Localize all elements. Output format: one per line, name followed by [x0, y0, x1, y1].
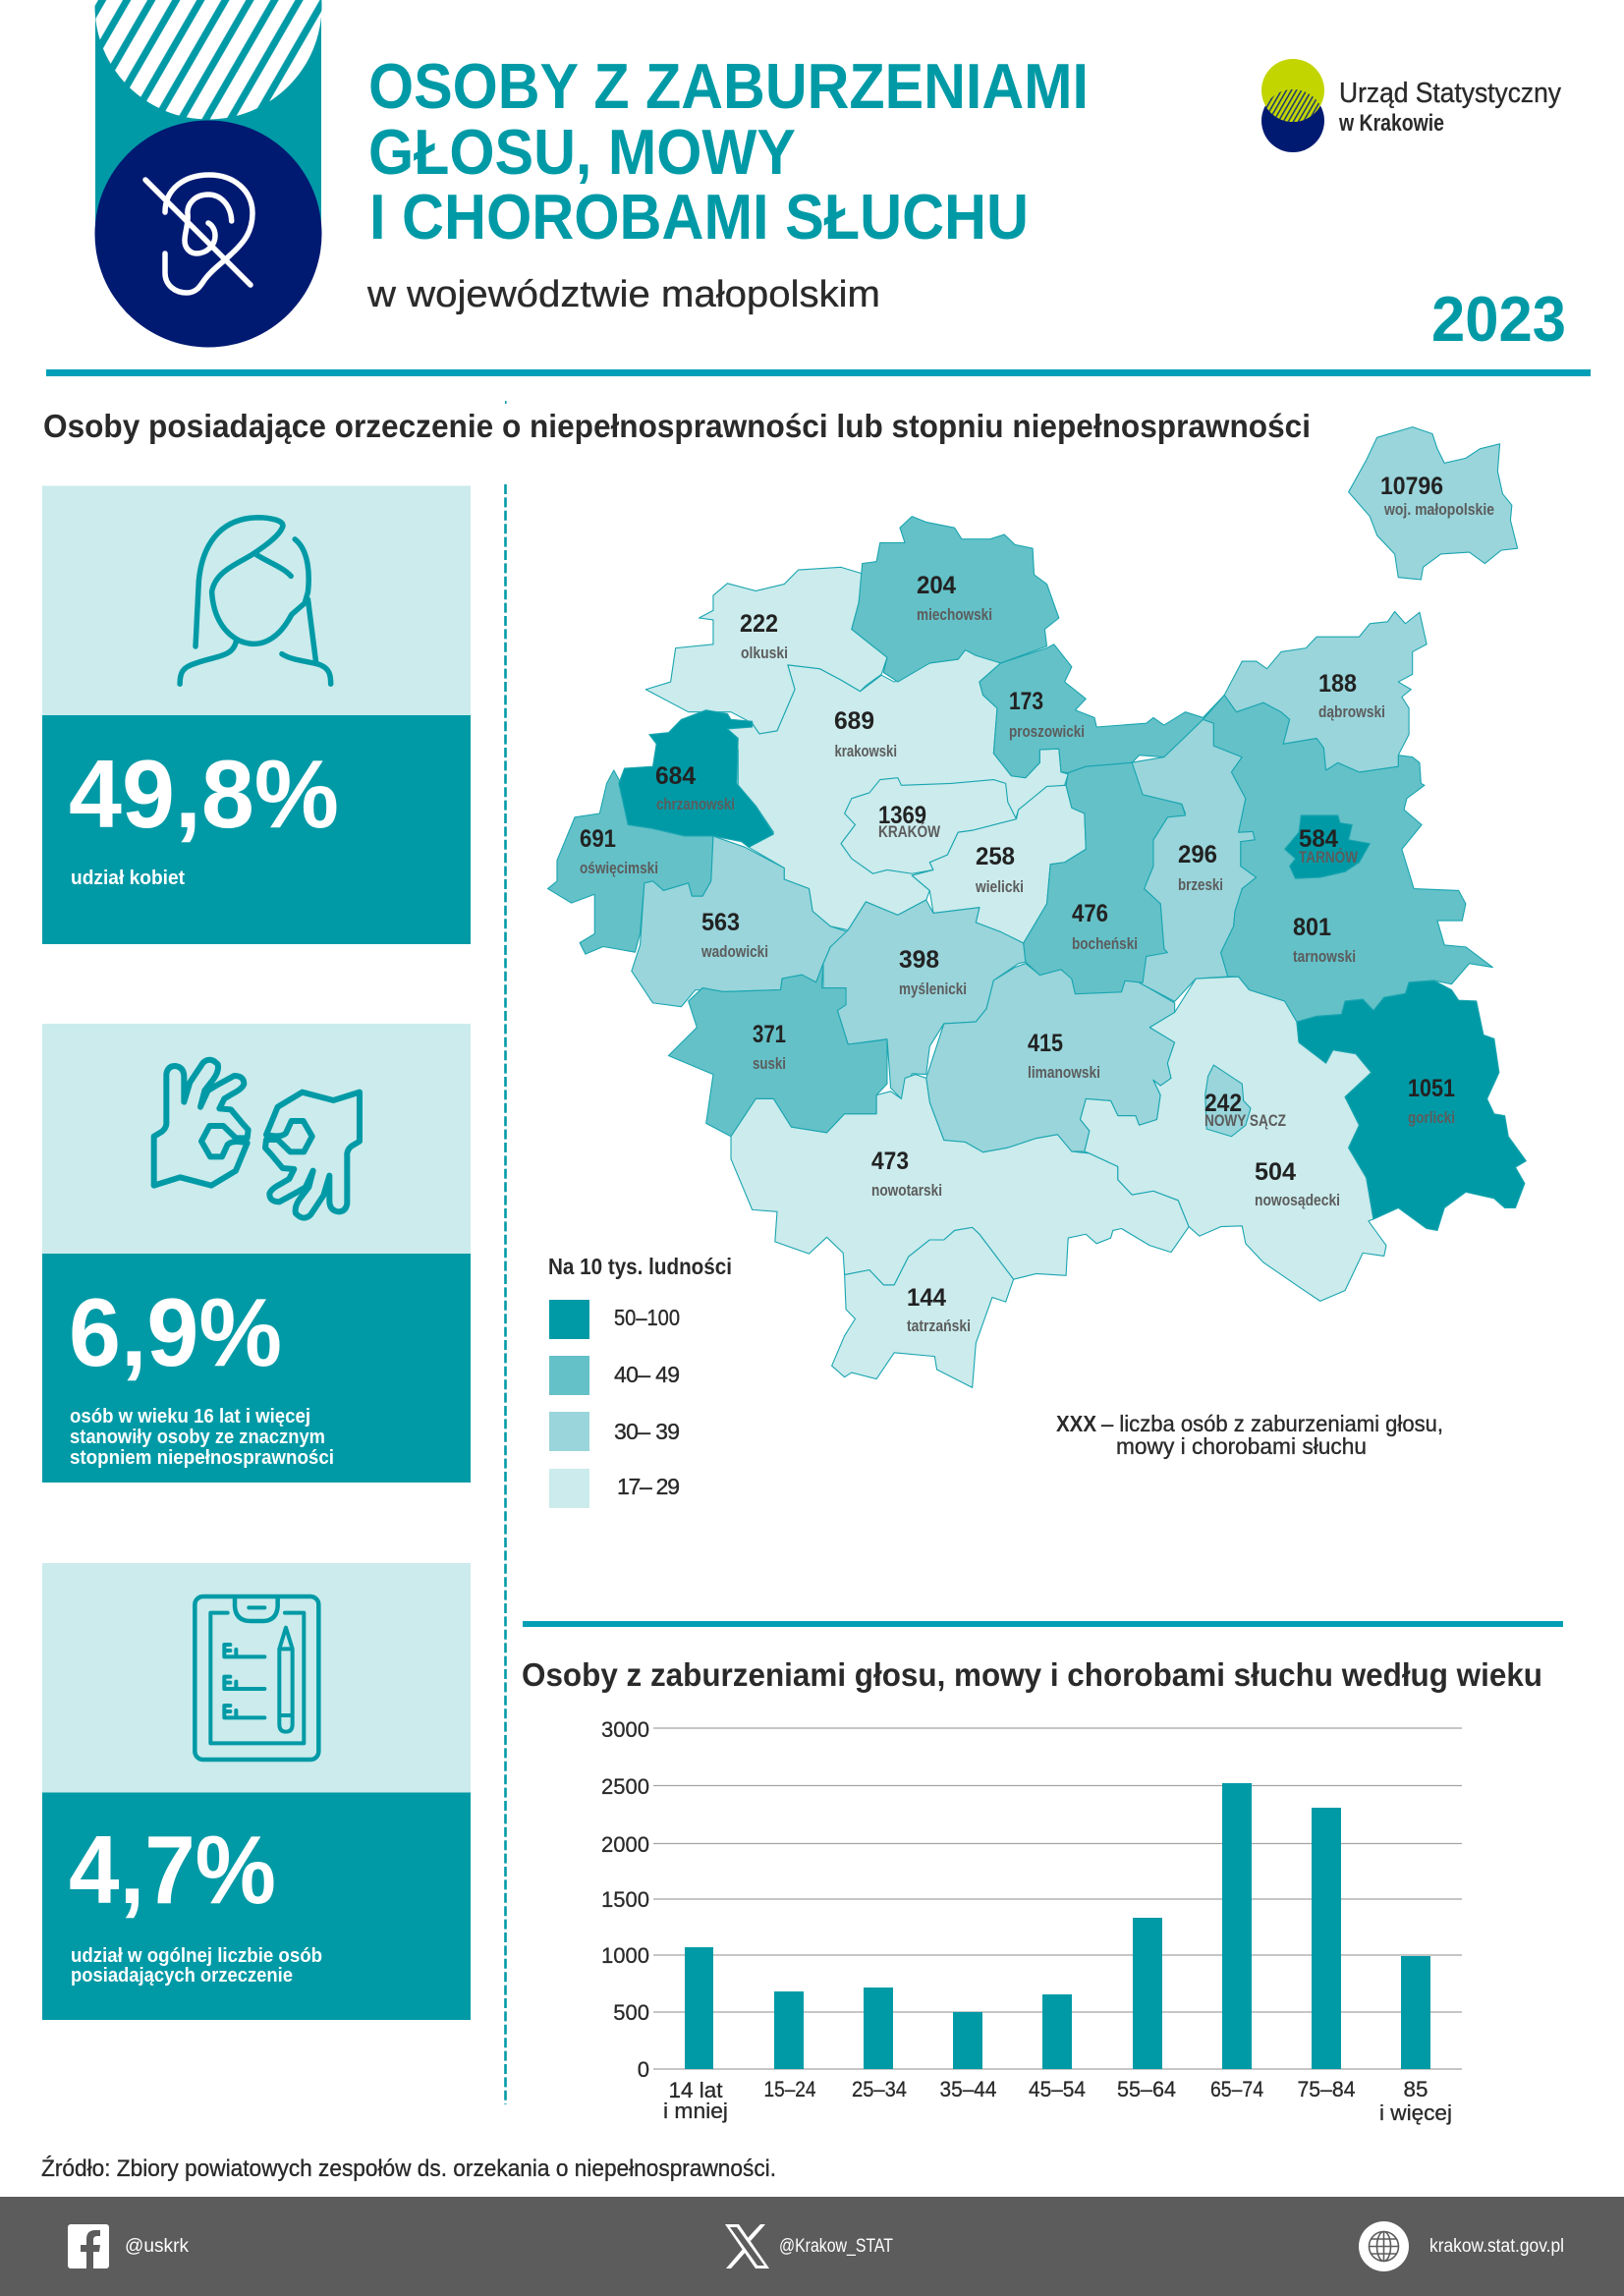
region: krakowski	[724, 650, 1068, 930]
map labels: 1369	[878, 802, 926, 829]
bar chart: 15–24	[764, 2077, 815, 2101]
map labels: chrzanowski	[656, 795, 735, 813]
panel: severe disability share: stanowiły osoby ze znacznym	[70, 1427, 325, 1448]
icon: sign language hands	[154, 1060, 360, 1218]
map labels: oświęcimski	[580, 859, 658, 877]
region: suski	[668, 964, 887, 1137]
map legend: 17– 29	[617, 1474, 680, 1499]
panel: severe disability share: osób w wieku 16 lat i więcej	[70, 1406, 310, 1428]
region: dąbrowski	[1224, 611, 1427, 772]
title: OSOBY Z ZABURZENIAMI	[368, 50, 1089, 122]
bar chart: 25–34	[852, 2077, 907, 2101]
region: miechowski	[852, 517, 1059, 682]
panel: share of all certified	[42, 1563, 471, 2020]
map labels: 563	[701, 909, 740, 936]
map legend: 40– 49	[614, 1362, 680, 1387]
map labels: krakowski	[835, 742, 897, 760]
bar chart: 35–44	[939, 2077, 996, 2101]
title: GŁOSU, MOWY	[368, 116, 796, 188]
map labels: 188	[1318, 670, 1357, 698]
bar chart: 45–54	[1029, 2077, 1086, 2101]
logo: Urząd Statystyczny	[1339, 78, 1561, 109]
region: tatrzański	[832, 1227, 1014, 1387]
map labels: 584	[1299, 825, 1338, 853]
map labels: 1051	[1408, 1075, 1455, 1102]
map labels: nowotarski	[871, 1181, 942, 1200]
map note: – liczba osób z zaburzeniami głosu,	[1101, 1411, 1443, 1436]
map labels: 371	[753, 1021, 786, 1048]
panel: women share	[42, 485, 471, 944]
map labels	[580, 473, 1494, 1335]
bar chart: 55–64	[1117, 2077, 1176, 2101]
map labels: 473	[871, 1148, 909, 1175]
bar chart: 14 lat	[668, 2078, 723, 2102]
footer	[0, 2197, 1624, 2296]
region: nowotarski	[731, 1075, 1189, 1285]
map labels: 204	[917, 572, 956, 599]
bar chart: 2000	[601, 1832, 649, 1857]
footer: @uskrk	[125, 2236, 189, 2257]
region: olkuski	[645, 567, 887, 734]
panel: severe disability share: 6,9%	[69, 1278, 282, 1386]
map labels: olkuski	[741, 644, 788, 662]
bar chart: 65–74	[1210, 2077, 1263, 2101]
subtitle: w województwie małopolskim	[366, 274, 880, 315]
bar chart: 500	[613, 2000, 649, 2025]
icon: clipboard	[195, 1596, 318, 1760]
header emblem	[94, 0, 322, 348]
map note	[1056, 1411, 1443, 1459]
map labels: 296	[1178, 841, 1217, 868]
map labels: 144	[907, 1284, 946, 1312]
map labels: gorlicki	[1408, 1108, 1455, 1127]
source: Źródło: Zbiory powiatowych zespołów ds. orzekania o niepełnosprawności.	[41, 2156, 776, 2182]
map labels: 242	[1204, 1090, 1242, 1117]
icon: facebook	[68, 2224, 109, 2268]
map labels: brzeski	[1178, 875, 1223, 894]
region: Nowy Sącz	[1205, 1065, 1251, 1137]
map labels: NOWY SĄCZ	[1204, 1111, 1286, 1130]
map labels: proszowicki	[1009, 722, 1085, 741]
panel: share of all certified: udział w ogólnej liczbie osób	[71, 1945, 322, 1967]
region: nowosądecki	[1081, 977, 1386, 1301]
map labels: 222	[740, 610, 778, 638]
map labels: 258	[976, 843, 1015, 870]
icon: globe	[1359, 2221, 1409, 2271]
map labels: 173	[1009, 688, 1043, 715]
region: myślenicki	[823, 900, 1026, 1098]
icon: woman	[180, 518, 331, 684]
footer: @Krakow_STAT	[779, 2236, 893, 2257]
panel: share of all certified: posiadających orzeczenie	[71, 1965, 293, 1987]
region: limanowski	[926, 964, 1175, 1152]
bar chart: 0	[638, 2057, 649, 2082]
map labels: 398	[899, 946, 939, 974]
map labels: 689	[834, 707, 874, 735]
map labels: myślenicki	[899, 980, 967, 998]
panel: share of all certified: 4,7%	[69, 1816, 276, 1924]
region: bocheński	[1024, 762, 1185, 994]
bar chart: 1000	[601, 1943, 649, 1968]
chart heading: Osoby z zaburzeniami głosu, mowy i chorobami słuchu według wieku	[522, 1656, 1542, 1693]
panel: severe disability share	[42, 1024, 471, 1483]
map labels: TARNÓW	[1299, 848, 1359, 867]
bar chart: i więcej	[1379, 2100, 1452, 2125]
map labels: 415	[1028, 1030, 1063, 1057]
panel: women share: udział kobiet	[71, 868, 185, 889]
region: gorlicki	[1297, 980, 1526, 1230]
map legend: 50–100	[614, 1305, 680, 1330]
region: wielicki	[912, 785, 1086, 943]
map legend: 30– 39	[614, 1419, 680, 1444]
map labels: suski	[753, 1054, 786, 1073]
map legend: Na 10 tys. ludności	[548, 1254, 732, 1279]
panel: women share: 49,8%	[69, 740, 339, 848]
map note: mowy i chorobami słuchu	[1116, 1433, 1367, 1459]
logo	[1261, 59, 1561, 152]
region: proszowicki	[980, 644, 1224, 778]
section heading: Osoby posiadające orzeczenie o niepełnosprawności lub stopniu niepełnosprawności	[43, 408, 1311, 444]
map labels: KRAKÓW	[878, 822, 941, 841]
bar chart: 1500	[601, 1887, 649, 1912]
map labels: wielicki	[975, 877, 1024, 896]
panel: severe disability share: stopniem niepełnosprawności	[70, 1447, 334, 1469]
logo: w Krakowie	[1338, 110, 1444, 137]
map labels: miechowski	[917, 605, 992, 624]
region: brzeski	[1131, 719, 1257, 1001]
map labels: dąbrowski	[1318, 702, 1385, 721]
bar chart: 3000	[601, 1717, 649, 1742]
bar chart: 85	[1403, 2077, 1428, 2101]
map labels: tarnowski	[1293, 947, 1356, 966]
footer: krakow.stat.gov.pl	[1429, 2236, 1564, 2257]
icon: crossed-out ear	[145, 175, 252, 293]
map labels: limanowski	[1028, 1063, 1100, 1082]
map labels: 691	[580, 825, 616, 853]
icon: X	[725, 2224, 769, 2268]
region: Kraków	[841, 778, 1016, 873]
map note: XXX	[1056, 1411, 1097, 1436]
region: wadowicki	[632, 836, 848, 1007]
map legend	[548, 1254, 732, 1508]
title: I CHOROBAMI SŁUCHU	[369, 181, 1029, 252]
year: 2023	[1431, 283, 1566, 355]
map labels: 801	[1293, 914, 1331, 941]
map labels: woj. małopolskie	[1383, 500, 1494, 519]
region: tarnowski	[1204, 695, 1492, 1022]
bar chart: 75–84	[1297, 2077, 1356, 2101]
region: Tarnów	[1285, 815, 1370, 878]
map labels: nowosądecki	[1255, 1191, 1340, 1209]
choropleth map	[548, 427, 1526, 1387]
map labels: 684	[655, 762, 696, 790]
inset: voivodeship	[1349, 427, 1518, 580]
map labels: 10796	[1380, 473, 1443, 500]
map labels: tatrzański	[907, 1316, 971, 1335]
map labels: 504	[1255, 1158, 1296, 1186]
region: chrzanowski	[619, 710, 773, 847]
bar chart	[601, 1717, 1462, 2125]
map labels: bocheński	[1072, 934, 1138, 953]
bar chart: 2500	[601, 1774, 649, 1799]
map labels: wadowicki	[700, 942, 768, 961]
region: oświęcimski	[548, 770, 713, 954]
bar chart: i mniej	[663, 2099, 728, 2123]
title	[368, 50, 1089, 252]
map labels: 476	[1072, 900, 1108, 927]
